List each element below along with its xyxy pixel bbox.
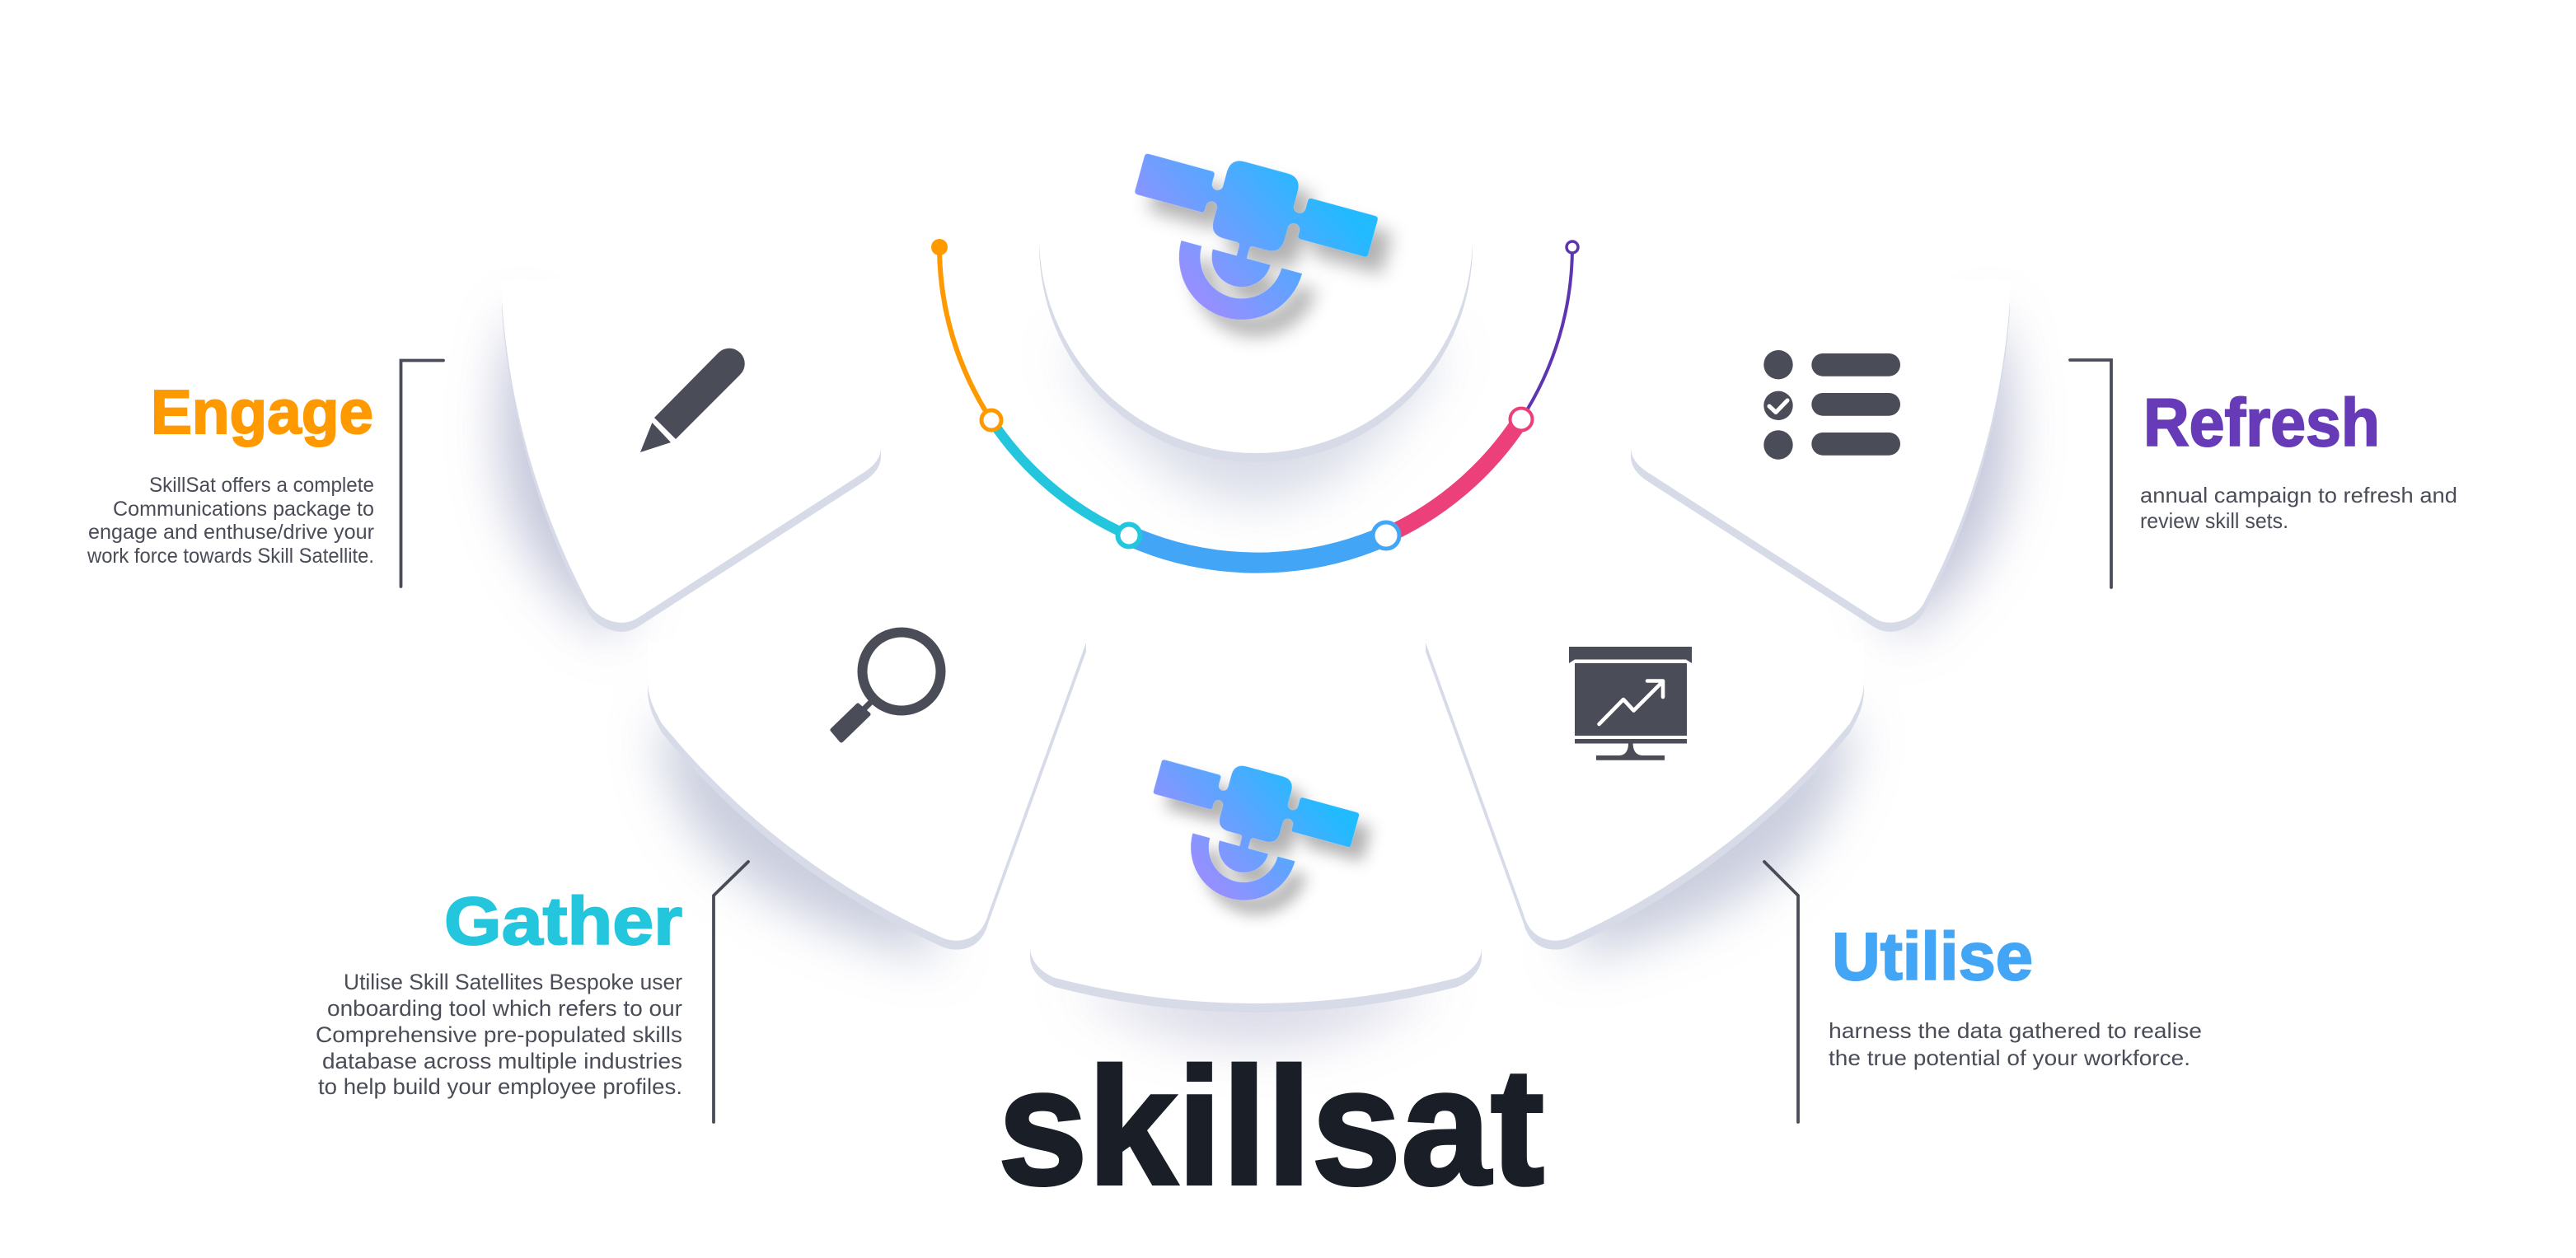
text block: refresh (2140, 386, 2457, 533)
icon: satellite large (1109, 136, 1383, 349)
body: engage: work force towards Skill Satellite. (87, 545, 374, 568)
panel: refresh (1631, 280, 2010, 632)
text block: gather (316, 884, 682, 1099)
panel: gather (648, 577, 1086, 950)
panel: centre top (1039, 136, 1473, 462)
progress arc (931, 239, 1578, 563)
text block: engage (87, 377, 374, 568)
heading: utilise: Utilise (1832, 919, 2033, 994)
body: engage (87, 474, 374, 568)
body: utilise: harness the data gathered to realise (1829, 1018, 2202, 1043)
heading: refresh: Refresh (2143, 386, 2380, 461)
bracket: utilise (1764, 862, 1798, 1122)
body: refresh (2140, 483, 2457, 533)
icon: checklist (1763, 350, 1900, 460)
panel: utilise (1426, 577, 1864, 950)
soft panel shadows (499, 309, 2012, 1045)
body: gather: Comprehensive pre-populated skills (316, 1022, 682, 1047)
heading: gather: Gather (444, 884, 682, 959)
wordmark: skillsat: skillsat (998, 1033, 1544, 1219)
body: engage: SkillSat offers a complete (149, 474, 374, 497)
body: gather (316, 970, 682, 1099)
body: gather: Utilise Skill Satellites Bespoke user (344, 970, 682, 994)
text block: utilise (1829, 919, 2202, 1070)
body: utilise (1829, 1018, 2202, 1070)
panel: centre bottom (1030, 659, 1482, 1012)
icon: magnifier (832, 633, 941, 741)
bracket: gather (714, 862, 748, 1122)
heading: engage: Engage (151, 377, 373, 447)
body: refresh: annual campaign to refresh and (2140, 483, 2457, 507)
body: engage: Communications package to (113, 498, 374, 521)
bracket: engage (400, 361, 443, 587)
body: utilise: the true potential of your workforce. (1829, 1045, 2190, 1070)
body: gather: to help build your employee profiles. (318, 1074, 682, 1099)
icon: pencil (640, 348, 745, 452)
body: engage: engage and enthuse/drive your (88, 521, 374, 544)
bracket: refresh (2070, 360, 2111, 587)
icon: presentation chart (1569, 647, 1692, 760)
body: gather: onboarding tool which refers to our (327, 996, 682, 1021)
body: refresh: review skill sets. (2140, 508, 2288, 533)
icon: satellite small (1131, 745, 1364, 925)
body: gather: database across multiple industries (322, 1049, 682, 1073)
panel: engage (502, 280, 881, 632)
